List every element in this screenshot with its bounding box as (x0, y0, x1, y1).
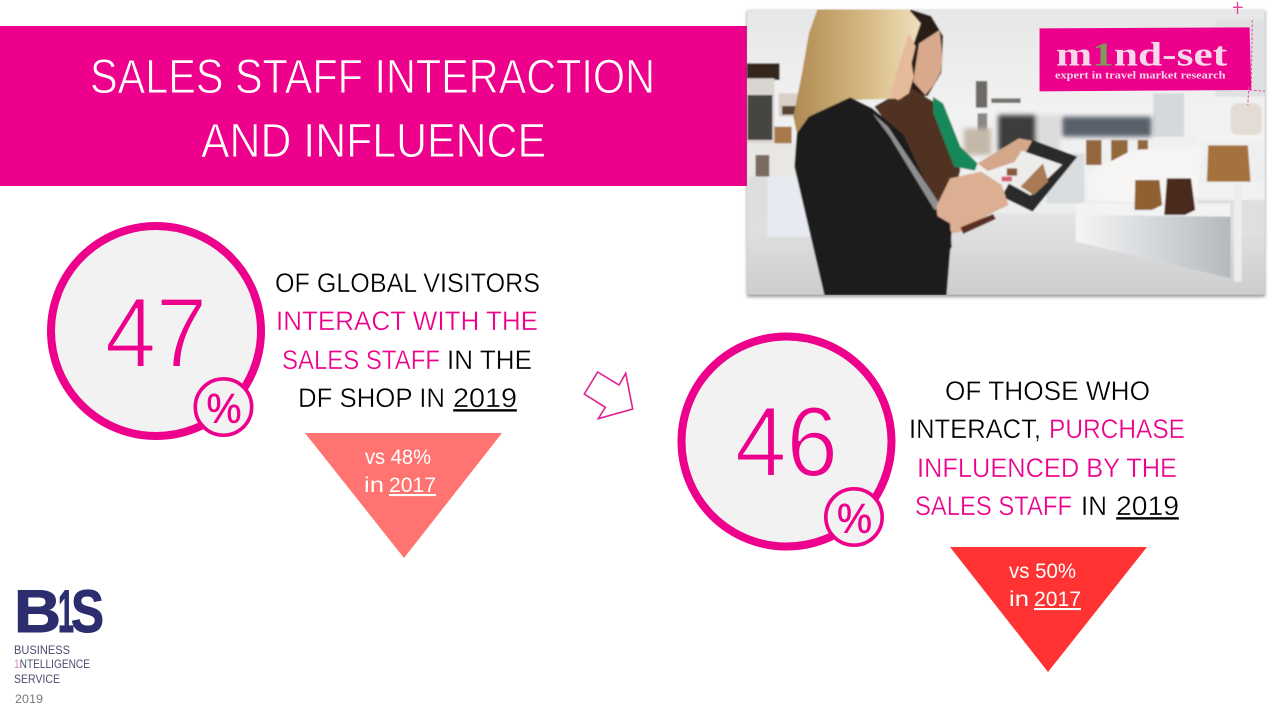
stat circle 46: 46 (735, 386, 838, 497)
percent badge (195, 379, 252, 435)
down triangle: vs 50% in 2017: vs 50% (1009, 560, 1076, 583)
title: SALES STAFF INTERACTION (90, 51, 655, 104)
stat circle 47: 47 (105, 277, 207, 388)
blonde woman (793, 9, 921, 133)
logo: mind-set (1040, 2, 1265, 105)
text: global visitors: OF GLOBAL VISITORS (275, 268, 540, 298)
logo: Business Intelligence Service: SERVICE (14, 672, 60, 686)
down triangle: vs 50% in 2017: 2017 (1034, 588, 1081, 611)
text: those who interact: INTERACT, (909, 414, 1041, 444)
logo: mind-set: m1nd-set (1056, 37, 1228, 73)
stat circle 46 (682, 336, 892, 546)
text: those who interact: 2019 (1116, 491, 1179, 521)
panel: 46% statistic (682, 336, 1185, 672)
text: those who interact: SALES STAFF (915, 491, 1072, 521)
logo: Business Intelligence Service: 1NTELLIGENCE (14, 657, 90, 671)
logo: Business Intelligence Service: S (71, 578, 104, 645)
text: those who interact: INFLUENCED BY THE (917, 453, 1177, 483)
text: those who interact: IN (1081, 491, 1107, 521)
year: 2019 (15, 692, 43, 706)
arrow (584, 372, 633, 419)
title: AND INFLUENCE (201, 115, 546, 168)
logo: mind-set: expert in travel market research (1055, 70, 1225, 82)
down triangle: vs 48% in 2017: in (364, 474, 384, 497)
down triangle: vs 50% in 2017: in (1009, 588, 1029, 611)
down triangle: vs 48% in 2017: vs 48% (365, 446, 431, 469)
logo: Business Intelligence Service: BUSINESS (14, 643, 70, 657)
text: those who interact: PURCHASE (1049, 414, 1185, 444)
title banner (0, 26, 747, 186)
text: global visitors (275, 268, 540, 413)
text: global visitors: DF SHOP IN (298, 383, 445, 413)
percent badge (826, 489, 882, 545)
down triangle: vs 48% in 2017 (305, 433, 502, 558)
logo: Business Intelligence Service: 1 (58, 578, 74, 645)
stat circle 47 (51, 226, 261, 436)
text: those who interact: OF THOSE WHO (945, 376, 1150, 406)
percent badge: % (837, 495, 872, 542)
text: global visitors: SALES STAFF (282, 345, 440, 375)
panel: 47% statistic (51, 226, 540, 558)
text: those who interact (909, 376, 1185, 521)
text: global visitors: INTERACT WITH THE (276, 306, 538, 336)
text: global visitors: 2019 (453, 383, 517, 413)
title (90, 51, 655, 168)
photo: two women with a tablet in a shop, with mind-set logo (747, 2, 1265, 297)
logo: Business Intelligence Service: B (14, 578, 61, 645)
down triangle: vs 48% in 2017: 2017 (389, 474, 436, 497)
down triangle: vs 50% in 2017 (950, 547, 1147, 672)
dark-haired woman (909, 9, 944, 98)
logo: Business Intelligence Service (14, 578, 104, 706)
percent badge: % (206, 385, 242, 432)
tablet (1002, 140, 1077, 212)
text: global visitors: IN THE (447, 345, 532, 375)
